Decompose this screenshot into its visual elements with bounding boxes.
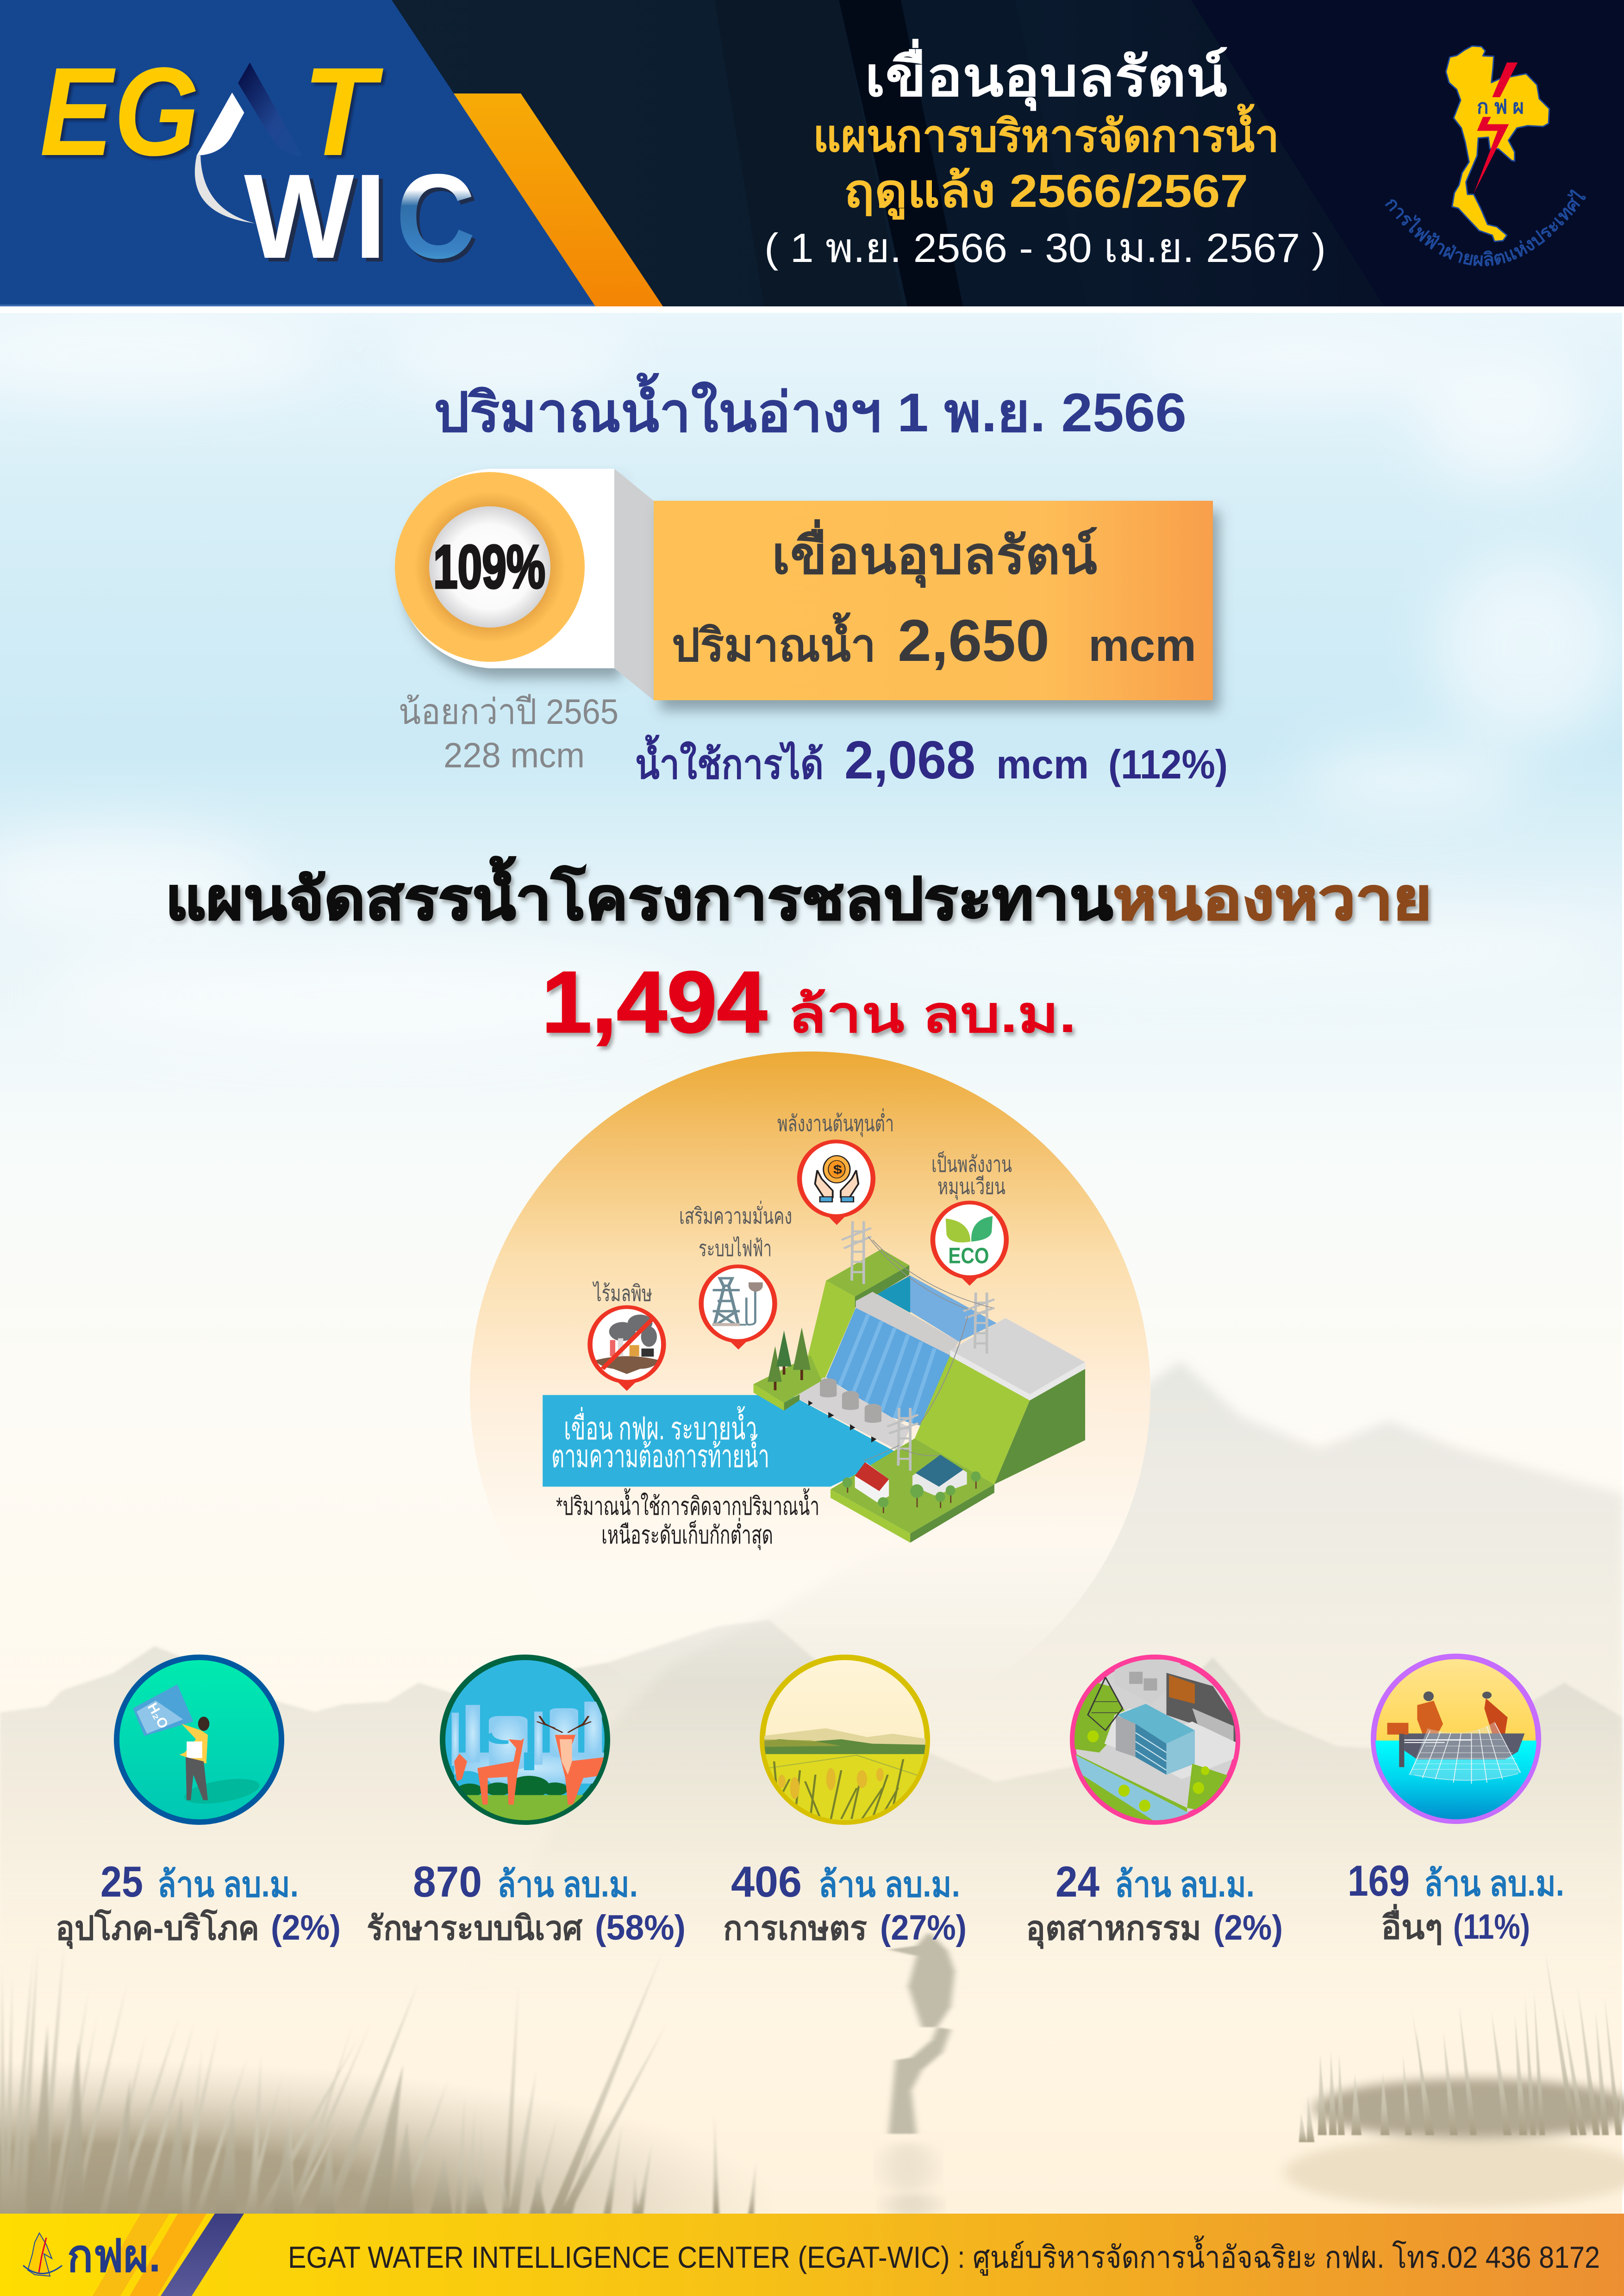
headline number: 1,494 million cubic metres: ล้าน ลบ.ม. [788, 986, 1076, 1043]
volume value [672, 608, 1196, 674]
stat: others: 169 [1348, 1856, 1410, 1905]
left platform [754, 1355, 822, 1403]
stat: industry: (2%) [1213, 1908, 1283, 1948]
panel: orange dam volume box [614, 469, 1213, 700]
spillway [826, 1308, 950, 1426]
volume value: mcm [1088, 620, 1196, 671]
text: grid security label [679, 1201, 792, 1261]
stat: consumption [56, 1857, 341, 1949]
text: usable water [635, 730, 1228, 790]
icon: low cost energy pin: $ [833, 1163, 842, 1176]
header title block: ( 1 พ.ย. 2566 - 30 เม.ย. 2567 ) [764, 225, 1326, 271]
logo: EGAT WIC: E [40, 41, 117, 182]
stat: agriculture [723, 1857, 967, 1948]
icon: eco renewable pin: ECO [948, 1243, 989, 1268]
right hill [915, 1355, 1030, 1484]
header title block [764, 39, 1326, 271]
header title block: แผนการบริหารจัดการน้ำ [813, 103, 1279, 161]
text: footnote: เหนือระดับเก็บกักต่ำสุด [601, 1518, 773, 1550]
stat: agriculture: การเกษตร [723, 1910, 867, 1947]
stat: industry: อุตสาหกรรม [1026, 1910, 1201, 1949]
background: misty mountains [0, 1362, 1624, 2013]
icon: low cost energy pin [800, 1141, 873, 1225]
text: footnote [556, 1488, 819, 1550]
logo: EGAT WIC: WI [244, 149, 387, 284]
icon circle: others fishermen [1363, 1656, 1549, 1827]
stat: consumption: ล้าน ลบ.ม. [157, 1865, 299, 1904]
heading: irrigation allocation plan [165, 856, 1432, 932]
text: renewable energy label: หมุนเวียน [937, 1175, 1006, 1200]
icon circle: consumption: H₂O [144, 1700, 171, 1731]
header title block: ฤดูแล้ง 2566/2567 [844, 165, 1248, 220]
bottom island [831, 1438, 994, 1533]
stat: consumption: 25 [100, 1857, 143, 1906]
stat: ecosystem [367, 1857, 686, 1948]
icon: no pollution pin [590, 1307, 663, 1391]
icon: grid security pin [701, 1266, 775, 1350]
background: bird on stump silhouette [883, 1932, 955, 2218]
heading: water volume on date: ปริมาณน้ำในอ่างฯ 1 พ.ย. 2566 [434, 373, 1187, 443]
text: usable water: mcm [996, 741, 1089, 787]
background: reeds, left [0, 1944, 806, 2214]
conifer trees [768, 1327, 811, 1390]
headline number: 1,494 million cubic metres [542, 953, 1076, 1051]
volume value: 2,650 [898, 608, 1049, 674]
stat: ecosystem: (58%) [595, 1908, 686, 1948]
text: no pollution label: ไร้มลพิษ [592, 1281, 652, 1306]
river label box [543, 1395, 899, 1487]
reservoir [879, 1276, 997, 1342]
text: low cost energy label: พลังงานต้นทุนต่ำ [777, 1108, 894, 1137]
gauge value: 109% [433, 533, 545, 601]
icon circle: industry buildings [1068, 1657, 1239, 1826]
footer logo: EGAT: กฟผ. [67, 2230, 161, 2281]
text: grid security label: ระบบไฟฟ้า [699, 1236, 772, 1261]
large circle backdrop [470, 1052, 1150, 1732]
text: less than 2565: น้อยกว่าปี 2565 [399, 692, 618, 732]
stat: industry [1026, 1857, 1283, 1949]
logo: Thailand map EGAT emblem: กฟผ [1477, 96, 1524, 118]
stat: others: (11%) [1453, 1907, 1530, 1947]
header title block: เขื่อนอุบลรัตน์ [865, 39, 1227, 111]
icon circle: ecosystem deer [439, 1657, 614, 1824]
text: footnote: *ปริมาณน้ำใช้การคิดจากปริมาณน้ำ [556, 1488, 819, 1520]
header banner [0, 0, 1624, 306]
stat: others: ล้าน ลบ.ม. [1424, 1864, 1564, 1904]
stat: consumption: (2%) [271, 1908, 341, 1948]
pylons [842, 1221, 994, 1471]
logo: EGAT WIC: C [399, 153, 479, 287]
concrete base [800, 1377, 910, 1452]
logo: EGAT WIC: C [396, 149, 475, 284]
orange diagonal stripe [454, 93, 663, 306]
volume value: ปริมาณน้ำ [672, 612, 876, 671]
text: less than 2565: 228 mcm [443, 736, 585, 775]
stat: agriculture: 406 [731, 1857, 802, 1906]
stat: industry: 24 [1056, 1857, 1099, 1906]
logo: EGAT WIC: T [303, 41, 384, 182]
stat: others: อื่นๆ [1381, 1904, 1443, 1946]
icon: eco renewable pin [933, 1202, 1006, 1286]
text: renewable energy label: เป็นพลังงาน [931, 1151, 1012, 1177]
stat: consumption: อุปโภค-บริโภค [56, 1908, 259, 1949]
text: renewable energy label [931, 1151, 1012, 1200]
stat: ecosystem: รักษาระบบนิเวศ [367, 1910, 583, 1947]
icon circle: agriculture rice field [753, 1657, 929, 1825]
panel: 109% gauge disc [395, 469, 614, 668]
stat: industry: ล้าน ลบ.ม. [1115, 1865, 1255, 1904]
round trees [843, 1471, 981, 1513]
stat: ecosystem: ล้าน ลบ.ม. [497, 1865, 638, 1904]
stat: others [1348, 1856, 1564, 1947]
logo: EGAT WIC: WI [248, 153, 391, 287]
text: grid security label: เสริมความมั่นคง [679, 1201, 792, 1229]
text: usable water: น้ำใช้การได้ [635, 734, 824, 787]
text: less than 2565 [399, 692, 618, 775]
dam name: เขื่อนอุบลรัตน์ [772, 519, 1097, 588]
logo: EGAT WIC: G [114, 41, 199, 182]
background: reeds, right [1284, 1951, 1624, 2208]
stat: agriculture: ล้าน ลบ.ม. [818, 1865, 960, 1904]
heading: irrigation allocation plan: แผนจัดสรรน้ำโครงการชลประทาน [165, 856, 1113, 932]
logo: EGAT WIC [40, 41, 479, 287]
dam illustration [590, 1141, 1085, 1543]
river label box: เขื่อน กฟผ. ระบายน้ำ [564, 1406, 757, 1446]
river label box: ตามความต้องการท้ายน้ำ [551, 1434, 769, 1474]
footer logo: EGAT [23, 2230, 161, 2281]
back hill [826, 1249, 909, 1297]
text: usable water: 2,068 [844, 730, 975, 790]
icon circle: consumption [117, 1657, 281, 1822]
footer bar [0, 2214, 1624, 2296]
text: usable water: (112%) [1108, 741, 1228, 787]
heading: irrigation allocation plan: หนองหวาย [1113, 866, 1432, 932]
houses [855, 1462, 889, 1502]
stat: ecosystem: 870 [413, 1857, 482, 1906]
headline number: 1,494 million cubic metres: 1,494 [542, 953, 767, 1051]
stat: agriculture: (27%) [880, 1908, 967, 1948]
